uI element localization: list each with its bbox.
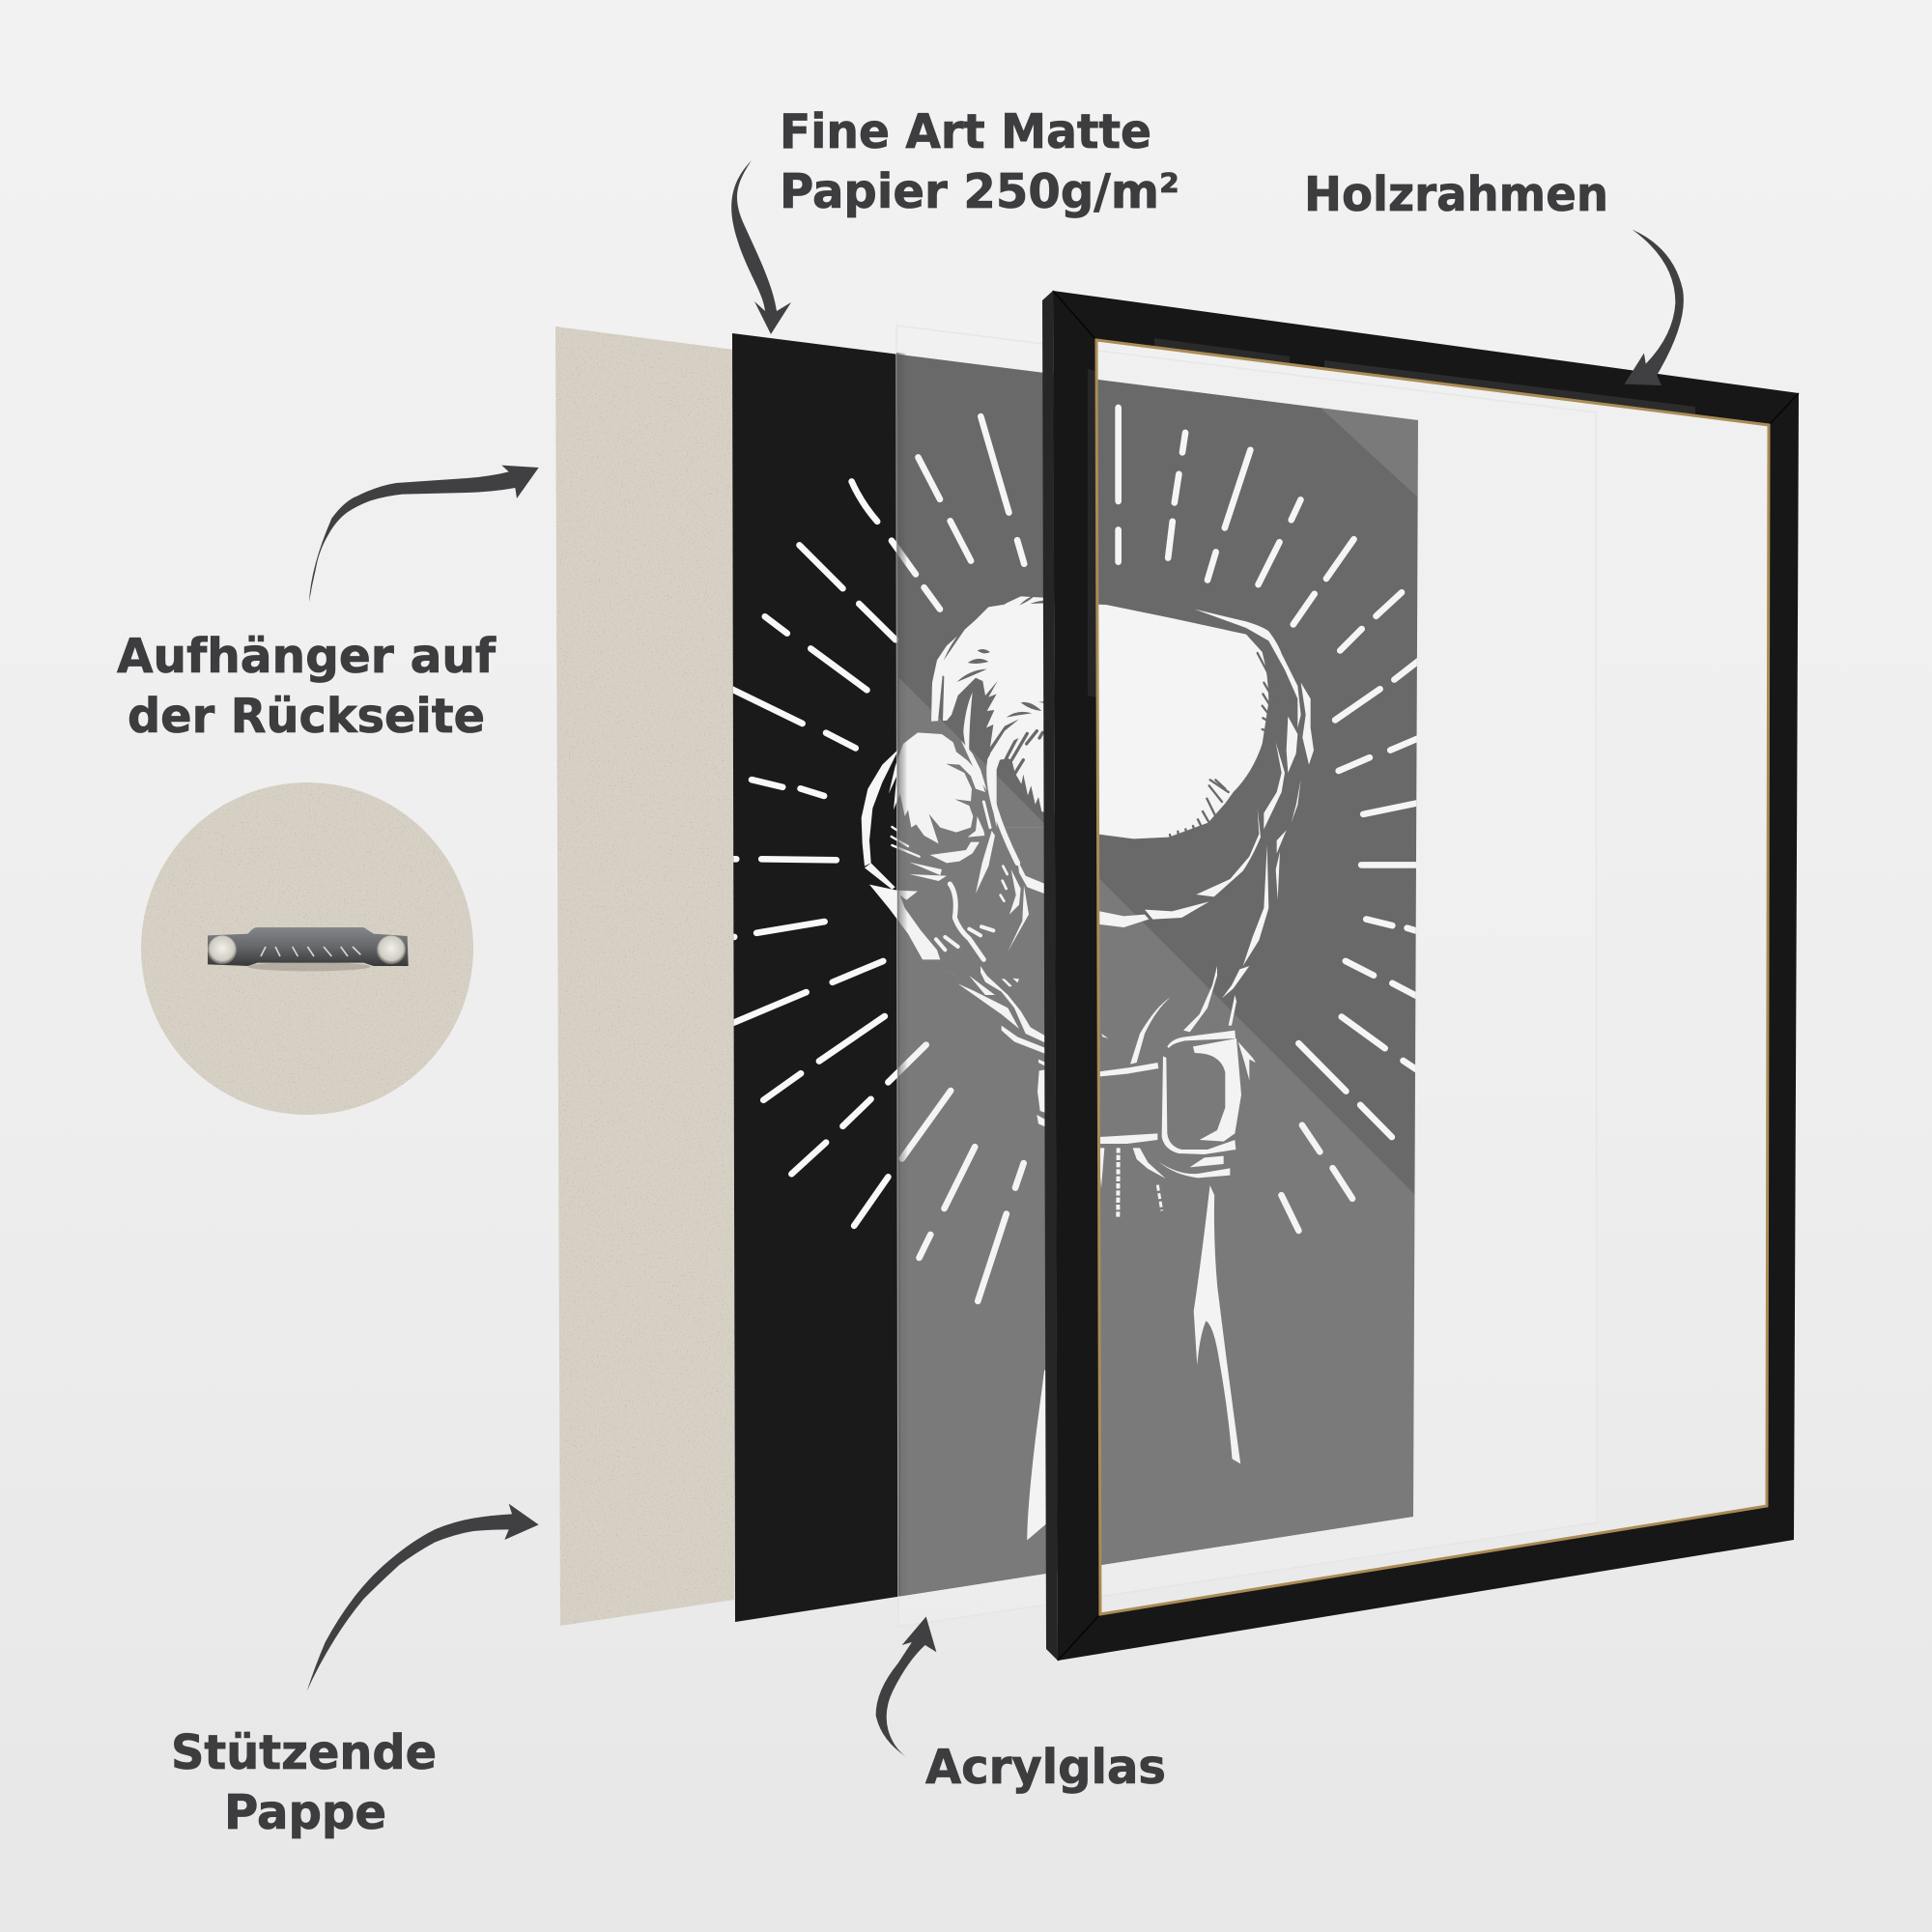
heading: Aufhänger auf der Rückseite: Aufhänger auf [117, 629, 497, 684]
glass reflection bands [896, 386, 1420, 1642]
heading: Fine Art Matte Papier 250g/m²: Papier 250g/m² [780, 164, 1179, 219]
arrow: to fine art paper [731, 160, 791, 334]
rays lower part [725, 992, 1426, 1301]
glove: dark wedge and flicks [938, 597, 1055, 827]
artwork: boxing glove and rays [725, 408, 1426, 1540]
rays upper part [725, 408, 1426, 1001]
glove: upper left body [927, 595, 1056, 828]
heading: Stützende Pappe [171, 1725, 437, 1840]
heading: Stützende Pappe: Pappe [224, 1785, 386, 1840]
heading: Stützende Pappe: Stützende [171, 1725, 437, 1780]
panel: acrylic glass sheet [896, 326, 1597, 1642]
arrow: to backing cardboard [307, 1504, 539, 1691]
callout: hanger detail circle [141, 782, 473, 1115]
heading: Acrylglas: Acrylglas [925, 1740, 1166, 1795]
icon: sawtooth hanger [208, 927, 409, 971]
heading: Aufhänger auf der Rückseite: der Rückseite [128, 689, 485, 744]
glove: fist and arm line work [862, 732, 1053, 959]
panel: wooden frame [1042, 291, 1799, 1661]
glove: hatching [1169, 651, 1269, 837]
heading: Fine Art Matte Papier 250g/m² [780, 104, 1179, 219]
glove: right part, seen through the frame [1092, 604, 1314, 966]
panel: fine art paper with artwork [725, 333, 1426, 1622]
heading: Holzrahmen: Holzrahmen [1304, 167, 1608, 222]
glove: wrist straps and cuff [939, 966, 1256, 1219]
arrow: to acrylic glass [876, 1616, 936, 1756]
arrow: to hanger on cardboard [309, 466, 539, 602]
panel: backing cardboard [555, 327, 734, 1626]
arrow: to wooden frame [1625, 230, 1684, 385]
heading: Fine Art Matte Papier 250g/m²: Fine Art Matte [780, 104, 1151, 159]
glove: hanging lace [1027, 1185, 1240, 1540]
heading: Aufhänger auf der Rückseite [117, 629, 497, 744]
